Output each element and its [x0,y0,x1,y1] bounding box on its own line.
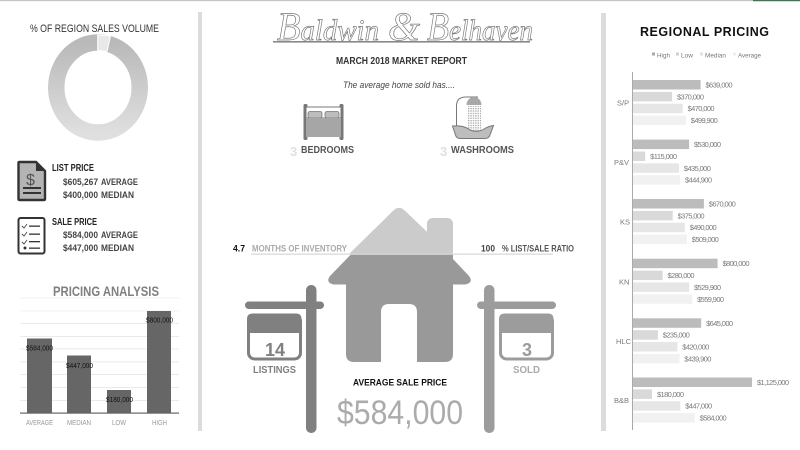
group: P&V: $115,000 [650,152,677,161]
donut chart: region sales volume [56,35,140,132]
bar chart: pricing analysis: HIGH [152,420,167,427]
group: S/P: $370,000 [677,92,704,101]
text: bedrooms: BEDROOMS [301,144,354,156]
icon: shower and bath [452,97,494,138]
group: P&V: P&V [614,158,629,167]
heading: sales volume: % OF REGION SALES VOLUME [30,23,159,35]
group: KS: $375,000 [678,211,705,220]
group: KN: $529,900 [694,283,721,292]
text: average sale price: AVERAGE SALE PRICE [353,378,447,388]
text: average sale price: $584,000 [337,394,463,432]
icon: listings sign [245,285,324,433]
text: average home intro: The average home sold has.... [343,80,455,91]
text block: sale price: AVERAGE [101,230,138,241]
group: HLC: $439,900 [684,354,711,363]
text block: list price: LIST PRICE [52,163,94,174]
text block: list price [52,163,138,201]
group: B&B [614,378,789,423]
text block: sale price: $584,000 [63,230,98,241]
icon: bed [304,104,344,140]
text: list/sale ratio: % LIST/SALE RATIO [502,244,574,254]
group: B&B: $1,125,000 [757,378,789,387]
title: Baldwin & Belhaven [273,4,533,49]
icon: house [328,208,471,362]
subtitle: MARCH 2018 MARKET REPORT [336,56,467,67]
text: washrooms [440,144,514,159]
icon: listings sign: 14 [265,340,285,360]
icon: sold sign [477,285,556,433]
group: S/P: $470,000 [688,104,715,113]
text: washrooms: WASHROOMS [451,144,514,156]
group: B&B: $584,000 [700,414,727,423]
group: S/P: $639,000 [706,80,732,90]
bar chart: pricing analysis: AVERAGE [26,420,53,427]
group: KS [620,199,736,244]
group: P&V [614,140,721,185]
icon: sold sign: SOLD [513,364,540,376]
text block: list price: $605,267 [63,177,98,188]
group: HLC: $235,000 [663,331,690,340]
group: HLC [616,318,733,363]
text: average sale price [337,378,463,432]
group: HLC: $420,000 [682,342,709,352]
text: bedrooms: 3 [290,144,297,159]
icon: price document [18,162,45,200]
group: P&V: $530,000 [694,140,721,149]
group: B&B: $180,000 [657,390,684,399]
title: Baldwin & Belhaven: Belhaven [427,4,533,49]
group: B&B: $447,000 [685,402,712,411]
group: HLC: HLC [616,337,632,346]
text: list/sale ratio: 100 [481,244,495,254]
group: KS: $509,000 [692,235,719,244]
icon: sold sign: 3 [522,340,532,360]
bar chart: pricing analysis: $584,000 [26,344,53,352]
panel: regional pricing [614,25,789,430]
legend: High [657,52,670,60]
text: washrooms: 3 [440,144,447,159]
group: S/P [617,80,732,125]
text block: sale price: SALE PRICE [52,217,97,228]
icon: price document: $ [26,172,35,189]
group: KS: KS [620,218,630,226]
text: months of inventory: MONTHS OF INVENTORY [252,244,347,254]
bar chart: pricing analysis: LOW [112,420,126,427]
panel: centre column [233,4,574,433]
group: P&V: $444,900 [685,176,712,185]
text block: list price: AVERAGE [101,177,138,188]
bar chart: pricing analysis [20,298,179,427]
text block: list price: MEDIAN [101,190,134,201]
text block: sale price [52,217,138,254]
title: Baldwin & Belhaven: Baldwin [277,4,379,49]
text: months of inventory: 4.7 [233,244,245,254]
icon: checklist [18,218,44,254]
group: KS: $670,000 [709,200,736,208]
group: S/P: $499,900 [691,116,718,125]
bar chart: pricing analysis: MEDIAN [67,420,91,427]
legend [652,52,761,60]
group: KN: $800,000 [722,259,750,268]
title: Baldwin & Belhaven: & [388,4,420,49]
bar chart: pricing analysis: $447,000 [66,361,93,370]
legend: Low [681,52,693,60]
group: HLC: $645,000 [706,319,733,328]
text: bedrooms [290,144,354,159]
text block: sale price: $447,000 [63,243,98,254]
group: KN: $559,900 [697,295,724,304]
legend: Average [738,52,761,60]
text: list/sale ratio [481,244,574,254]
icon: listings sign: LISTINGS [253,364,296,376]
group: KN [619,259,750,304]
heading: pricing analysis: PRICING ANALYSIS [53,283,159,299]
group: S/P: S/P [617,98,629,108]
group: P&V: $435,000 [684,164,711,173]
panel: left column [18,23,179,427]
group: KN: KN [619,278,629,286]
group: KN: $280,000 [668,271,694,280]
group: B&B: B&B [614,396,629,405]
bar chart: regional pricing [614,72,789,430]
bar chart: pricing analysis: $800,000 [146,316,173,324]
legend: Median [705,52,726,60]
group: KS: $490,000 [690,223,717,232]
text block: list price: $400,000 [63,190,98,201]
bar chart: pricing analysis: $180,000 [106,395,133,404]
text block: sale price: MEDIAN [101,243,134,254]
heading: regional pricing: REGIONAL PRICING [640,25,769,39]
